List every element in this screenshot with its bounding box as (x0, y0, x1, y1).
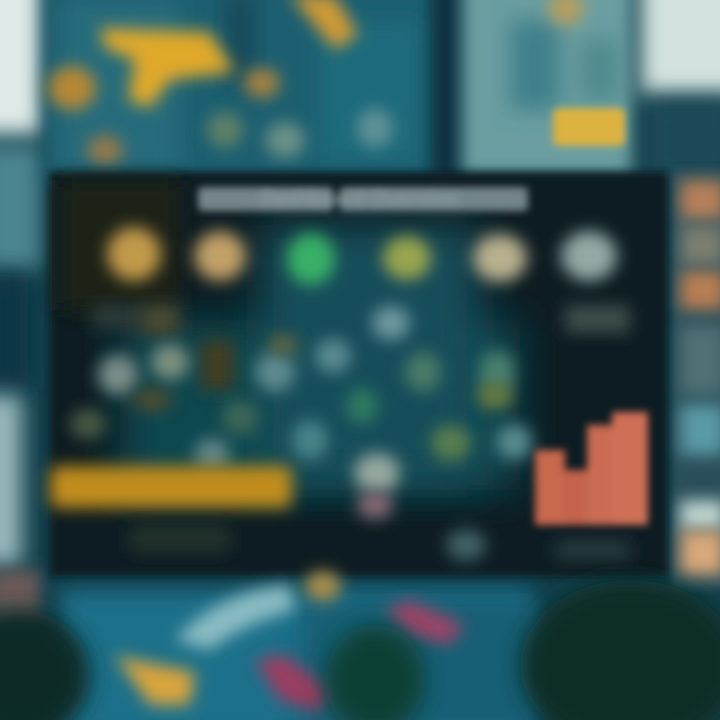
text rows under icons (92, 305, 630, 390)
heading (198, 187, 528, 211)
window highlight: yellow patches (48, 0, 393, 165)
right side building blocks (672, 170, 720, 590)
building: right tower (462, 0, 632, 175)
building: left tower (45, 0, 460, 180)
heading: Dashboard Overview (261, 188, 460, 210)
panel: dashboard (50, 172, 667, 577)
icons row: circular metrics (107, 227, 617, 285)
foreground: bottom water and foliage (0, 571, 720, 720)
scattered data points (70, 306, 532, 561)
bar chart (535, 412, 648, 525)
yellow progress bar (50, 466, 292, 508)
caption under bar (130, 525, 230, 553)
caption under chart (555, 540, 630, 560)
